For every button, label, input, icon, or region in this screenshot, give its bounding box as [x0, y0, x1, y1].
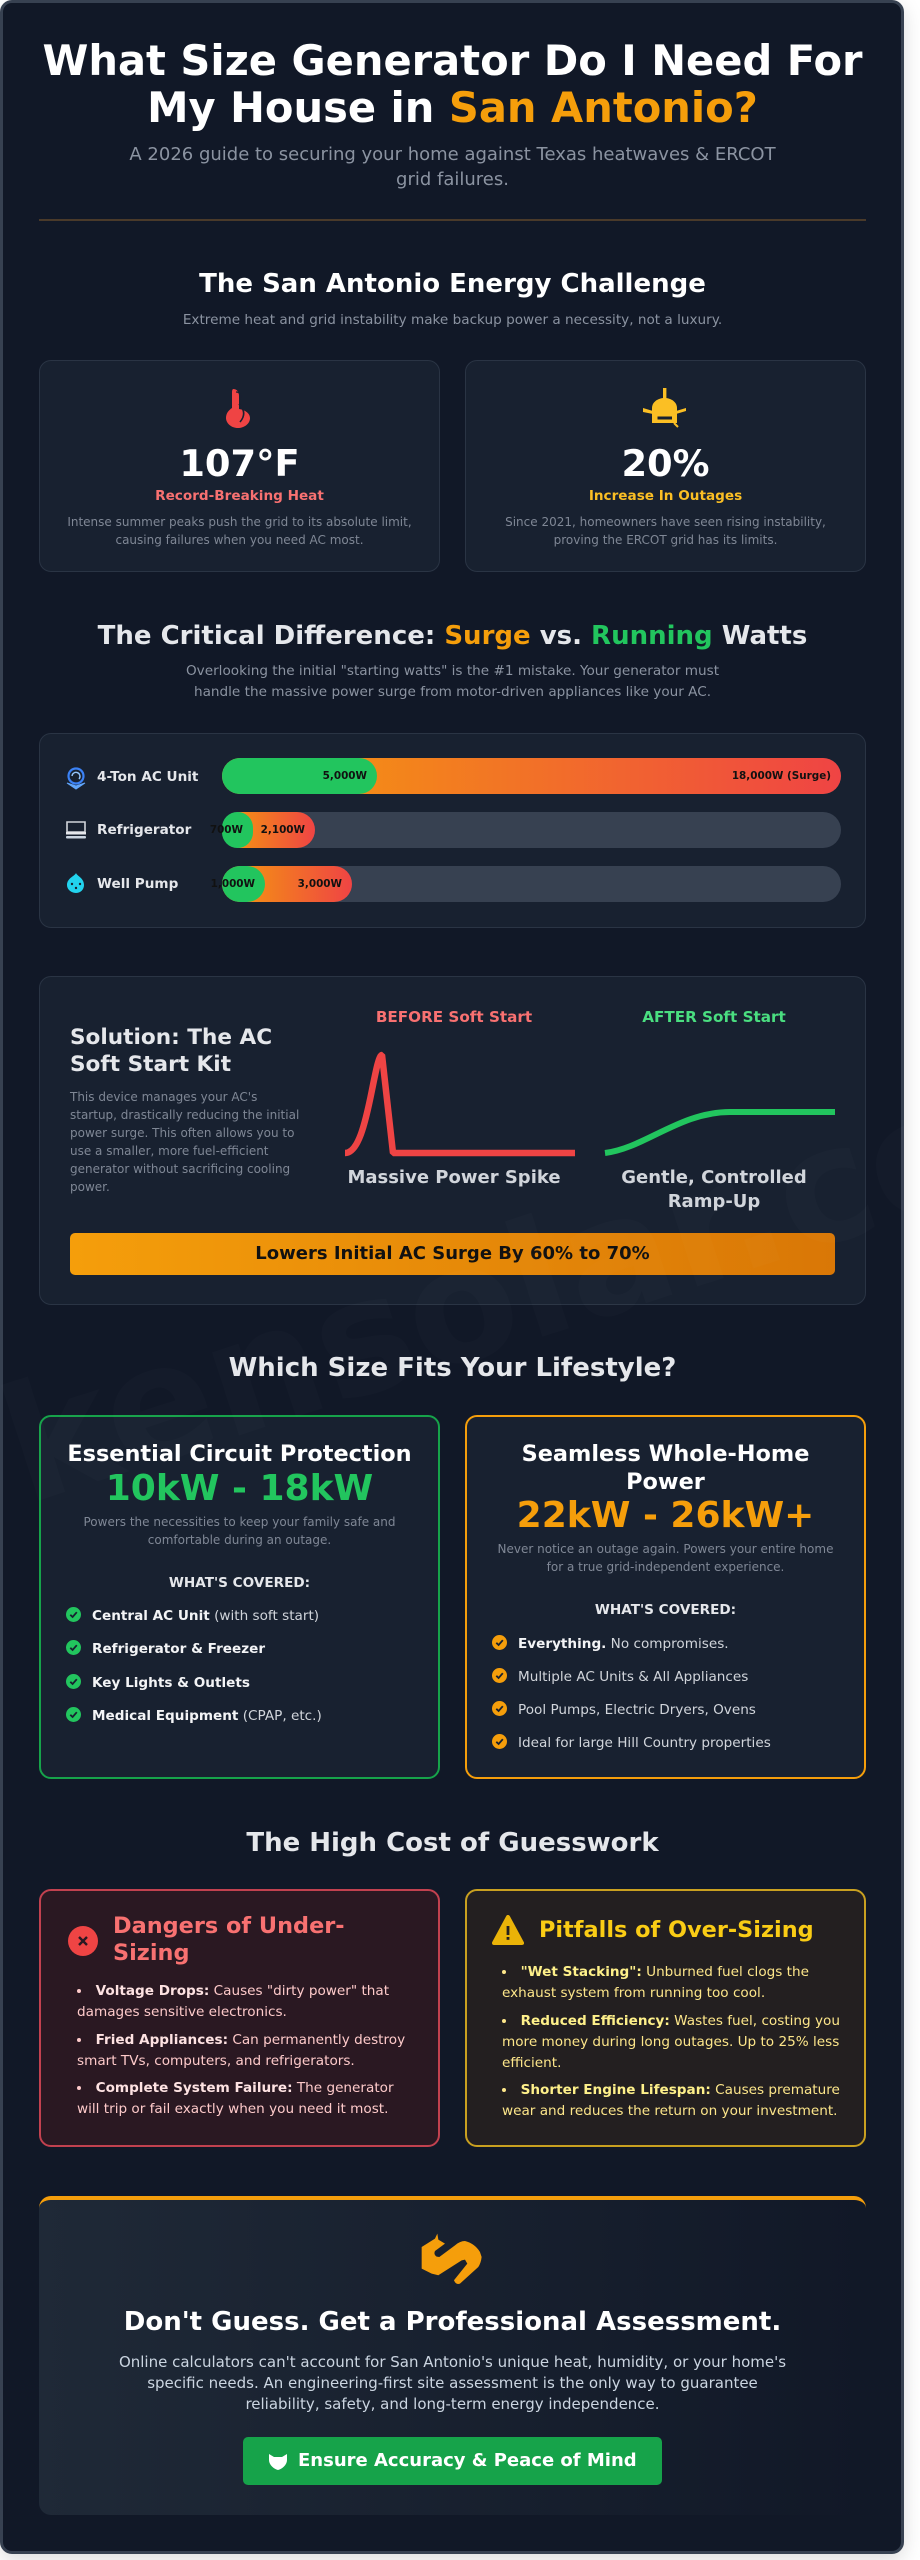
heading: solution — [70, 1025, 272, 1077]
panel: record heat stat — [39, 360, 440, 572]
text: solution description: use a smaller, more fuel-efficient — [70, 1144, 269, 1158]
check item: pool pumps: Pool Pumps, Electric Dryers, Ovens — [518, 1702, 756, 1718]
heading: energy challenge: The San Antonio Energy Challenge — [199, 269, 706, 299]
subtitle: grid failures. — [396, 169, 509, 190]
button: ensure accuracy — [243, 2437, 662, 2485]
list: pitfalls: wear and reduces the return on your investment. — [502, 2103, 838, 2119]
subheading: critical difference: handle the massive power surge from motor-driven appliances like your AC. — [194, 684, 711, 700]
subheading: what's covered whole-home: WHAT'S COVERED: — [595, 1602, 736, 1618]
list: dangers: smart TVs, computers, and refrigerators. — [77, 2052, 355, 2068]
text: solution description — [70, 1090, 299, 1194]
heading: lifestyle: Which Size Fits Your Lifestyle? — [229, 1353, 676, 1383]
surge segment: AC — [222, 758, 841, 794]
stat: 20%: 20% — [621, 442, 710, 485]
surge segment: refrigerator — [222, 812, 315, 848]
checklist: essential — [66, 1607, 322, 1724]
heading: call to action: Don't Guess. Get a Professional Assessment. — [124, 2307, 781, 2337]
surge segment: refrigerator: 2,100W — [261, 824, 305, 836]
panel: soft start solution — [39, 976, 866, 1305]
icon: shield — [269, 2454, 287, 2470]
check item: medical: Medical Equipment (CPAP, etc.) — [92, 1708, 322, 1724]
heading: pitfalls: Pitfalls of Over-Sizing — [539, 1917, 814, 1943]
list: pitfalls — [502, 1964, 840, 2119]
heading: dangers: Sizing — [113, 1940, 189, 1966]
stat description: heat: Intense summer peaks push the grid to its absolute limit, — [67, 515, 412, 529]
heading: dangers: Dangers of Under- — [113, 1913, 345, 1939]
chart: power spike curve — [345, 1052, 575, 1156]
panel: over-sizing pitfalls — [465, 1889, 866, 2147]
icon: well pump — [67, 873, 84, 893]
tier range: 22kW to 26kW: 22kW - 26kW+ — [517, 1495, 814, 1536]
list: dangers: Voltage Drops: Causes "dirty power" that — [96, 1983, 389, 1999]
tier description: whole-home — [498, 1542, 833, 1574]
text: solution description: power surge. This often allows you to — [70, 1126, 294, 1140]
panel: whole-home power — [465, 1415, 866, 1779]
tier description: essential: comfortable during an outage. — [148, 1533, 331, 1547]
tier title: whole-home — [522, 1441, 809, 1495]
panel: essential circuit protection — [39, 1415, 440, 1779]
callout: surge reduction banner: Lowers Initial AC Surge By 60% to 70% — [255, 1243, 650, 1264]
heading: solution: Soft Start Kit — [70, 1052, 231, 1077]
label: well pump: Well Pump — [97, 876, 178, 892]
check item: central AC: Central AC Unit (with soft start) — [92, 1608, 319, 1624]
checklist: whole-home — [492, 1635, 771, 1751]
text: solution description: This device manages your AC's — [70, 1090, 257, 1104]
icon: warning triangle — [492, 1915, 524, 1945]
list: dangers — [77, 1983, 405, 2117]
heading: solution: Solution: The AC — [70, 1025, 272, 1050]
text: call to action — [119, 2353, 786, 2413]
text: solution description: power. — [70, 1180, 110, 1194]
chart: gentle ramp curve — [604, 1109, 835, 1156]
callout: surge reduction banner — [70, 1233, 835, 1275]
tier description: essential — [84, 1515, 395, 1547]
title — [42, 36, 863, 132]
stat description: outages: proving the ERCOT grid has its limits. — [554, 533, 777, 547]
icon: error circle — [68, 1926, 98, 1956]
list: pitfalls: "Wet Stacking": Unburned fuel clogs the — [521, 1964, 809, 1980]
tier description: essential: Powers the necessities to keep your family safe and — [84, 1515, 395, 1529]
surge segment: well pump: 3,000W — [298, 878, 342, 890]
check item: key lights: Key Lights & Outlets — [92, 1675, 250, 1691]
check item: multiple AC: Multiple AC Units & All Appliances — [518, 1669, 748, 1685]
icon: thermometer — [226, 389, 250, 428]
list: pitfalls: more money during long outages. Up to 25% less — [502, 2034, 839, 2050]
list: pitfalls: Shorter Engine Lifespan: Causes premature — [521, 2082, 840, 2098]
panel: call to action — [39, 2196, 866, 2515]
text: solution description: generator without sacrificing cooling — [70, 1162, 290, 1176]
panel: outages stat — [465, 360, 866, 572]
title: My House in San Antonio? — [147, 83, 758, 132]
bar: well pump — [222, 866, 841, 902]
text: call to action: specific needs. An engineering-first site assessment is the only way to guarantee — [147, 2374, 758, 2392]
icon: alarm bell — [643, 388, 686, 428]
heading: critical difference: The Critical Difference: Surge vs. Running Watts — [98, 621, 807, 651]
panel: under-sizing dangers — [39, 1889, 440, 2147]
running segment: AC — [222, 758, 377, 794]
stat description: outages — [505, 515, 826, 547]
tier range: 10kW to 18kW: 10kW - 18kW — [106, 1468, 373, 1509]
tier title: whole-home: Seamless Whole-Home — [522, 1441, 809, 1467]
stat description: heat: causing failures when you need AC most. — [115, 533, 364, 547]
check item: refrigerator: Refrigerator & Freezer — [92, 1641, 265, 1657]
list: dangers: will trip or fail exactly when you need it most. — [77, 2101, 388, 2117]
label: before soft start: BEFORE Soft Start — [376, 1008, 532, 1026]
subheading: critical difference: Overlooking the initial "starting watts" is the #1 mistake. Your generator must — [186, 663, 719, 679]
stat: 107F: 107°F — [179, 442, 300, 485]
panel: surge bar chart — [39, 733, 866, 928]
subtitle — [129, 144, 776, 190]
tier title: whole-home: Power — [626, 1469, 705, 1495]
running segment: well pump: 1,000W — [211, 878, 255, 890]
caption: gentle ramp up — [621, 1167, 807, 1212]
heading: dangers — [113, 1913, 345, 1966]
heading: cost of guesswork: The High Cost of Guesswork — [246, 1828, 659, 1858]
button label: Ensure Accuracy & Peace of Mind — [298, 2450, 637, 2471]
bar: refrigerator — [222, 812, 841, 848]
label: after soft start: AFTER Soft Start — [642, 1008, 786, 1026]
icon: refrigerator — [66, 821, 86, 838]
surge segment: AC: 18,000W (Surge) — [732, 770, 831, 782]
stat description: outages: Since 2021, homeowners have seen rising instability, — [505, 515, 826, 529]
list: dangers: Fried Appliances: Can permanently destroy — [96, 2032, 405, 2048]
divider — [39, 219, 866, 221]
tier description: whole-home: for a true grid-independent experience. — [547, 1560, 784, 1574]
subtitle: A 2026 guide to securing your home against Texas heatwaves & ERCOT — [129, 144, 776, 165]
list: pitfalls: Reduced Efficiency: Wastes fuel, costing you — [521, 2012, 840, 2028]
caption: massive power spike: Massive Power Spike — [347, 1167, 561, 1188]
running segment: refrigerator — [222, 812, 253, 848]
check item: everything: Everything. No compromises. — [518, 1636, 729, 1652]
list: pitfalls: exhaust system from running too cool. — [502, 1985, 765, 2001]
caption: gentle ramp up: Gentle, Controlled — [621, 1167, 807, 1188]
text: call to action: reliability, safety, and long-term energy independence. — [245, 2395, 660, 2413]
stat label: outages: Increase In Outages — [589, 488, 742, 504]
running segment: AC: 5,000W — [323, 770, 367, 782]
running segment: well pump — [222, 866, 265, 902]
label: refrigerator: Refrigerator — [97, 822, 191, 838]
check item: hill country: Ideal for large Hill Country properties — [518, 1735, 771, 1751]
stat description: heat — [67, 515, 412, 547]
tier title: essential: Essential Circuit Protection — [67, 1441, 412, 1467]
label: AC unit: 4-Ton AC Unit — [97, 769, 198, 785]
running segment: refrigerator: 700W — [210, 824, 243, 836]
surge segment: well pump — [222, 866, 352, 902]
subheading: what's covered essential: WHAT'S COVERED: — [169, 1575, 310, 1591]
icon: AC unit — [66, 767, 86, 790]
bar: AC unit — [222, 758, 841, 794]
text: call to action: Online calculators can't account for San Antonio's unique heat, humidity, or your home's — [119, 2353, 786, 2371]
text: solution description: startup, drastically reducing the initial — [70, 1108, 299, 1122]
subheading: critical difference — [186, 663, 719, 700]
icon: S-curve arrow — [422, 2234, 482, 2284]
caption: gentle ramp up: Ramp-Up — [668, 1191, 760, 1212]
list: pitfalls: efficient. — [502, 2054, 561, 2070]
tier description: whole-home: Never notice an outage again. Powers your entire home — [498, 1542, 833, 1556]
list: dangers: Complete System Failure: The generator — [96, 2080, 394, 2096]
subheading: energy challenge: Extreme heat and grid instability make backup power a necessity, not a luxury. — [183, 312, 722, 328]
stat label: heat: Record-Breaking Heat — [155, 488, 324, 504]
title: What Size Generator Do I Need For — [42, 36, 863, 85]
list: dangers: damages sensitive electronics. — [77, 2004, 287, 2020]
